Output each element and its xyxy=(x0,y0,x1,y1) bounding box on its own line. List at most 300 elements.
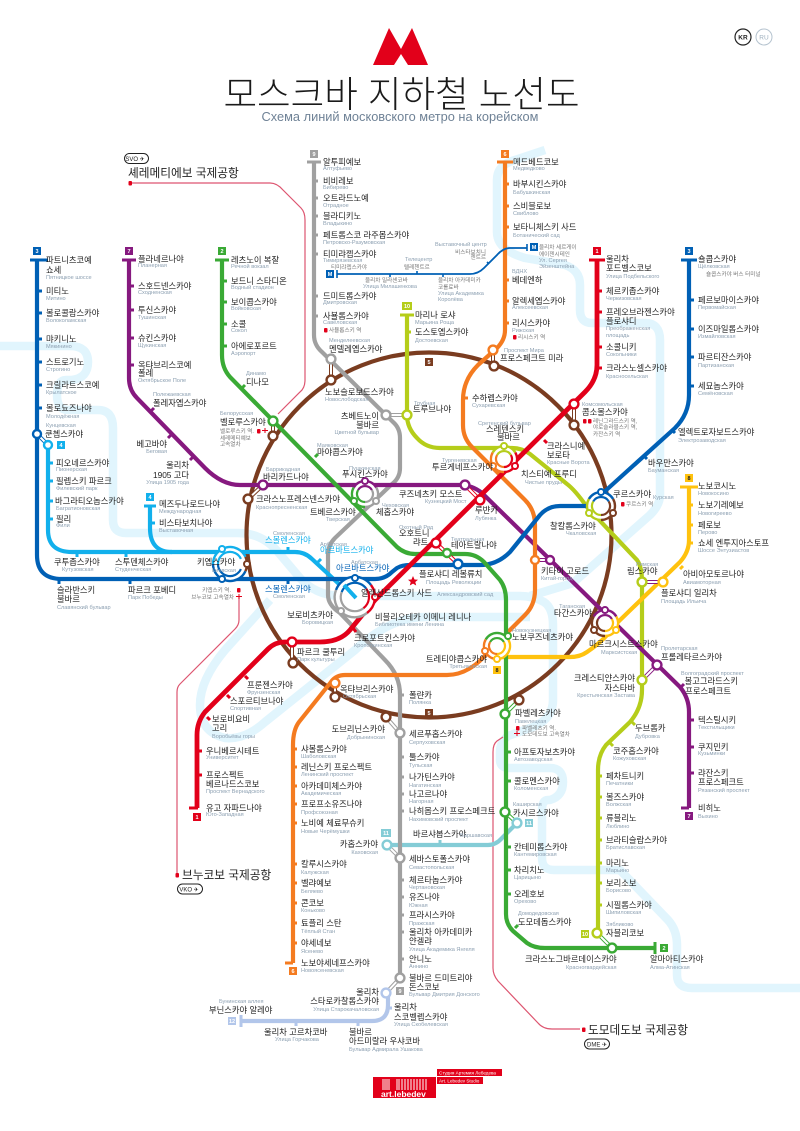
station Kuntsevskaya: Кунцевская xyxy=(46,423,76,429)
station Semyonovskaya xyxy=(698,381,744,397)
station Marksistskaya: 마르크시스트스카야 xyxy=(589,639,658,649)
station Park Pobedy: Парк Победы xyxy=(128,595,163,601)
station Nagornaya: 나고르나야 xyxy=(409,789,448,799)
station Planernaya: Планерная xyxy=(138,263,167,269)
station Telecentr xyxy=(404,257,432,271)
station Tretyakovskaya: Третьяковская xyxy=(449,664,487,670)
station Skhodnenskaya: Сходненская xyxy=(138,290,172,296)
station Arbatskaya light: 아르바트스카야 xyxy=(320,545,374,555)
station Leninsky Prospekt: 레닌스키 프로스펙트 xyxy=(301,762,372,772)
station Belorusskaya: 고속열차 xyxy=(220,440,241,448)
station Sevastopolskaya: Севастопольская xyxy=(409,865,454,871)
station Shipilovskaya: 시필롭스카야 xyxy=(606,900,652,910)
station Tekstilshchiki xyxy=(698,715,736,731)
station Lyublino: Люблино xyxy=(606,824,629,830)
station Sretensky Bulvar: 불바르 xyxy=(497,432,520,442)
station Ryazansky: 랴잔스키 xyxy=(698,768,729,778)
station Akademika Yangelya: 울리차 아카데미카 xyxy=(409,927,473,937)
language switch RU xyxy=(756,29,772,45)
station Lubyanka: 루뱐카 xyxy=(475,505,498,515)
station Rizhskaya xyxy=(512,318,551,341)
station Domodedovskaya: Домодедовская xyxy=(518,911,559,917)
station Shabolovskaya: 샤볼롭스카야 xyxy=(301,744,347,754)
station Slavyansky Bulvar: 불바르 xyxy=(57,594,80,604)
station Aviamotornaya: 아비아모토르나야 xyxy=(683,569,744,579)
station Orekhovo: 오레호보 xyxy=(514,889,545,899)
airport Sheremetyevo xyxy=(124,154,239,180)
station Ploshchad Revolyutsii: Площадь Революции xyxy=(426,580,481,586)
station Tulskaya xyxy=(409,752,440,769)
station Novokosino: 노보코시노 xyxy=(698,481,737,491)
station Perovo: Перово xyxy=(698,530,717,536)
station Sportivnaya: Спортивная xyxy=(230,706,261,712)
station Tekstilshchiki: 텍스틸시키 xyxy=(698,715,736,725)
station Skobelevskaya: 스코벨렙스카야 xyxy=(394,1012,448,1022)
station Kuzminki xyxy=(698,742,729,757)
station Vystavochny Tsentr: 첸트르 xyxy=(471,253,486,261)
station Dubrovka xyxy=(635,723,666,740)
station Strogino: Строгино xyxy=(46,367,70,373)
station Begovaya: 베고바야 xyxy=(136,439,167,449)
station Polezhaevskaya: Полежаевская xyxy=(153,392,191,398)
station Prazhskaya: Пражская xyxy=(409,921,434,927)
station Kurskaya: Курская xyxy=(653,495,674,501)
line number badges: 1 xyxy=(195,815,199,821)
station Buninskaya Alleya xyxy=(209,999,273,1015)
station Mezhdunarodnaya: 메즈두나로드나야 xyxy=(159,499,220,509)
airport Domodedovo: DME ✈ xyxy=(587,1042,607,1048)
station Maryino xyxy=(606,858,629,874)
station Belorusskaya: 벨로루스카야 xyxy=(220,417,266,427)
station Lyublino xyxy=(606,813,637,830)
station Ploshchad Ilyicha: 플로샤디 일리차 xyxy=(661,588,717,598)
station Orekhovo xyxy=(514,889,545,905)
station VDNKh xyxy=(512,269,543,285)
language switch KR: KR xyxy=(738,34,748,42)
station Prazhskaya: 프라시스카야 xyxy=(409,910,455,920)
station Pervomayskaya: 페르보마이스카야 xyxy=(698,295,759,305)
station Borisovo xyxy=(606,878,637,894)
station Annino: 안니노 xyxy=(409,954,432,964)
airport Domodedovo xyxy=(584,1024,688,1049)
station Vernadskogo: Проспект Вернадского xyxy=(206,789,265,795)
station Myakinino xyxy=(46,334,77,350)
station Kakhovskaya: Каховская xyxy=(351,850,378,856)
station Arbatskaya blue: Арбатская xyxy=(351,560,378,566)
station Elektrozavodskaya: 엘렉트로자보드스카야 xyxy=(678,427,755,437)
station Paveletskaya: 파벨레츠카야 xyxy=(515,708,561,718)
station Lubyanka: Лубянка xyxy=(475,516,497,522)
station Borisovo: 보리소보 xyxy=(606,878,637,888)
station Mayakovskaya: Маяковская xyxy=(317,443,348,449)
station Buninskaya Alleya: Бунинская аллея xyxy=(219,999,264,1005)
station Timiryazevskaya: 티미랴젭스카야 xyxy=(331,263,367,271)
station Sokolniki xyxy=(606,342,637,358)
station Vernadskogo xyxy=(206,770,265,795)
station Partizanskaya: Партизанская xyxy=(698,363,734,369)
station Komsomolskaya: 콤소몰스카야 xyxy=(582,407,628,417)
station Izmaylovskaya xyxy=(698,324,759,340)
station Shchyolkovskaya: 숄콥스카야 버스 터미널 xyxy=(706,270,761,278)
station Aeroport: Аэропорт xyxy=(231,351,256,357)
station Cherkizovskaya: 체르키좁스카야 xyxy=(606,286,660,296)
station Filyovsky Park: 필렙스키 파르크 xyxy=(56,476,112,486)
station Ulitsa Gorchakova: 울리차 고르차코바 xyxy=(264,1027,328,1037)
station Studencheskaya xyxy=(115,557,169,573)
station Nagatinskaya: Нагатинская xyxy=(409,783,441,789)
station Sretensky Bulvar: Сретенский бульвар xyxy=(478,420,531,427)
line 8 route xyxy=(497,487,698,657)
station Belorusskaya: 벨로루스키 역. xyxy=(220,427,254,435)
station Novogireyevo xyxy=(698,500,744,517)
station Mendeleevskaya: Менделеевская xyxy=(329,338,370,344)
station Sokol: 소콜 xyxy=(231,319,247,329)
station Yasenevo: Ясенево xyxy=(301,949,323,955)
station Shchukinskaya xyxy=(138,333,177,349)
station Kievskaya: 브누코보 고속열차 xyxy=(191,593,234,601)
station Tulskaya: 툴스카야 xyxy=(409,752,440,762)
station Botanichesky Sad: 보타니체스키 사드 xyxy=(513,222,577,232)
station Savyolovskaya: 사뵬롭스카야 xyxy=(323,311,369,321)
station Bratislavskaya: Братиславская xyxy=(606,845,645,851)
station Tverskaya: 트베르스카야 xyxy=(310,507,356,517)
station Okhotny Ryad: 오호트니 xyxy=(399,528,430,538)
line 3 route xyxy=(30,260,697,584)
station Dinamo: Динамо xyxy=(246,371,266,377)
station Vodny Stadion: 보드니 스타디온 xyxy=(231,276,287,286)
Art Lebedev logo: art.lebedev xyxy=(381,1089,426,1099)
station Vorobyovy Gory xyxy=(212,714,255,740)
station Sukharevskaya: Сухаревская xyxy=(472,403,505,409)
station Shchyolkovskaya xyxy=(698,254,761,278)
station Akademicheskaya xyxy=(301,781,362,797)
station Oktyabrskoye Pole: Октябрьское Поле xyxy=(138,378,186,384)
station Teatralnaya: 테아트랄나야 xyxy=(451,540,497,550)
station Pyatnitskoye: 파트니츠코예 xyxy=(46,255,92,265)
station Starokachalovskaya: Улица Старокачаловская xyxy=(313,1007,379,1013)
station Okhotny Ryad: Охотный Ряд xyxy=(399,524,434,531)
station Krasnoselskaya xyxy=(606,363,667,380)
line number badges: 2 xyxy=(662,946,666,952)
station Novoyasenevskaya: 노보야세네프스카야 xyxy=(301,958,370,968)
language switch RU: RU xyxy=(759,34,769,42)
station Shchyolkovskaya: 숄콥스카야 xyxy=(698,254,737,264)
station Ulitsa Eisensteina: Ул. Сергея xyxy=(539,258,567,264)
station Ulitsa Eisensteina: 에이젠시테인 xyxy=(539,250,570,258)
station Novye Cheryomushki: Новые Черёмушки xyxy=(301,829,350,835)
stations line 9 xyxy=(287,157,496,998)
station Rechnoy Vokzal xyxy=(231,255,279,270)
station Filyovsky Park xyxy=(56,476,112,492)
station Kievskaya: 키옙스키 역. xyxy=(202,586,231,594)
station Kantemirovskaya: Кантемировская xyxy=(514,852,557,858)
station Novogireyevo: 노보기레예보 xyxy=(698,500,744,510)
station Oktyabrskaya: Октябрьская xyxy=(343,694,376,700)
station Vodny Stadion: Водный стадион xyxy=(231,284,274,291)
station Tyoply Stan: Тёплый Стан xyxy=(301,928,335,935)
station Skobelevskaya: Улица Скобелевская xyxy=(394,1022,448,1028)
airport Vnukovo xyxy=(178,869,272,894)
station Krasnoselskaya: 크라스노셀스카야 xyxy=(606,363,667,373)
station Shchyolkovskaya: Щёлковская xyxy=(698,264,730,270)
station Novokuznetskaya: 노보쿠즈네츠카야 xyxy=(512,632,573,642)
station Vernadskogo: 베르나드스코보 xyxy=(206,779,260,789)
monorail M icons xyxy=(326,243,538,278)
line number badges: 3 xyxy=(687,249,691,255)
station Akademika Yangelya: Улица Академика Янгеля xyxy=(409,947,475,953)
station Kropotkinskaya xyxy=(354,633,415,649)
station Barrikadnaya: 바리카드나야 xyxy=(263,472,309,482)
station Belyayevo: Беляево xyxy=(301,889,323,895)
transfer connectors xyxy=(37,350,663,993)
station Sokol: Сокол xyxy=(231,328,247,334)
station Preobrazhenskaya: площадь xyxy=(606,333,629,339)
station Babushkinskaya: 바부시킨스카야 xyxy=(513,179,567,189)
station Biblioteka: 비블리오테카 이메니 레니나 xyxy=(375,612,472,622)
station Maryina Roshcha: 마리나 로샤 xyxy=(415,310,456,320)
station Bibirevo: Бибирево xyxy=(323,185,348,191)
station Maryino: 마리노 xyxy=(606,858,629,868)
station Novoslobodskaya: Новослободская xyxy=(325,397,368,403)
station Kashirskaya: Каширская xyxy=(513,802,542,808)
station Slavyansky Bulvar: Славянский бульвар xyxy=(57,604,111,611)
line 4 route xyxy=(48,445,353,597)
station Otradnoye xyxy=(323,193,369,209)
station Pyatnitskoye: 쇼세 xyxy=(46,265,61,275)
station Vladykino: Владыкино xyxy=(323,221,352,227)
station Pionerskaya: Пионерская xyxy=(56,467,87,473)
station Tverskaya: Тверская xyxy=(326,517,350,523)
station Tushinskaya: 투신스카야 xyxy=(138,305,177,315)
station Kolomenskaya: 콜로멘스카야 xyxy=(514,776,560,786)
station Polezhaevskaya xyxy=(153,392,207,408)
station Mitino: Митино xyxy=(46,296,66,302)
station Preobrazhenskaya: 프레오브라젠스카야 xyxy=(606,307,675,317)
station Dobryninskaya: Добрынинская xyxy=(347,735,385,741)
station Preobrazhenskaya: 플로샤디 xyxy=(606,316,637,326)
station Rechnoy Vokzal: 레츠노이 복잘 xyxy=(231,255,279,265)
station Vystavochny Tsentr: Выставочный центр xyxy=(435,241,487,248)
station Novoslobodskaya: 노보슬로보드스카야 xyxy=(325,387,394,397)
station Timiryazevskaya: 티미랴젭스카야 xyxy=(323,249,377,259)
station Babushkinskaya: Бабушкинская xyxy=(513,190,550,196)
station Tretyakovskaya xyxy=(426,654,487,670)
station Okhotny Ryad: 랴트 xyxy=(413,537,429,547)
station Oktyabrskaya: 옥탸브리스카야 xyxy=(340,684,394,694)
station Frunzenskaya: Фрунзенская xyxy=(247,690,280,696)
station Komsomolskaya: Комсомольская xyxy=(582,402,623,408)
station Yugo-Zapadnaya xyxy=(206,803,262,818)
station Ryazansky: Рязанский проспект xyxy=(698,787,750,794)
station Proletarskaya: Пролетарская xyxy=(661,646,698,652)
station Planernaya xyxy=(138,254,184,269)
station Smolenskaya blue: Смоленская xyxy=(273,594,305,600)
station Petrovsko-Razumovskaya xyxy=(323,230,410,246)
line 11 route xyxy=(387,823,517,845)
station Belyayevo: 벨랴예보 xyxy=(301,878,332,888)
station Savyolovskaya: Савёловская xyxy=(323,320,357,326)
station Kropotkinskaya: Кропоткинская xyxy=(354,643,392,649)
station Kitay-gorod: Китай-город xyxy=(541,575,573,582)
station Chkalovskaya: 찰칼롭스카야 xyxy=(550,521,596,531)
line number badges: 7 xyxy=(687,814,691,820)
station Bibirevo xyxy=(323,176,354,191)
station Bulvar Dmitriya Donskogo xyxy=(409,973,480,998)
station Krestyanskaya Zastava: 자스타바 xyxy=(604,683,635,693)
station Ploshchad Ilyicha xyxy=(661,588,717,605)
red star xyxy=(408,576,418,586)
station Prospekt Mira xyxy=(500,348,564,363)
station Orekhovo: Орехово xyxy=(514,899,536,905)
station Pechatniki: 페차트니키 xyxy=(606,771,644,781)
station Rimskaya xyxy=(627,562,658,576)
station Akademika Korolyova xyxy=(438,276,485,303)
station Kitay-gorod xyxy=(541,566,589,582)
station Trubnaya: 트루브나야 xyxy=(413,404,452,414)
subtitle: Схема линий московского метро на корейском xyxy=(262,109,538,124)
station Annino: Аннино xyxy=(409,964,428,970)
station Aviamotornaya: Авиамоторная xyxy=(683,580,721,586)
station Belorusskaya xyxy=(220,411,266,448)
station Molodyozhnaya xyxy=(46,403,92,420)
station Smolenskaya blue: 스몰렌스카야 xyxy=(265,584,311,594)
station Bulvar Dmitriya Donskogo: Бульвар Дмитрия Донского xyxy=(409,992,480,998)
station Trubnaya: Трубная xyxy=(414,401,435,407)
station Serpukhovskaya: Серпуховская xyxy=(409,740,445,746)
station Vorobyovy Gory: 고리 xyxy=(212,723,227,733)
line number badges: 1 xyxy=(595,249,599,255)
station Vystavochny Tsentr: 비스타보치니 xyxy=(455,248,486,256)
station Tekstilshchiki: Текстильщики xyxy=(698,725,735,731)
station Park Pobedy: 파르크 포베디 xyxy=(128,585,176,595)
station Borovitskaya: 보로비츠카야 xyxy=(287,610,333,620)
station Taganskaya: Таганская xyxy=(559,604,585,610)
station Profsoyuznaya: Профсоюзная xyxy=(301,810,338,816)
station Kuznetsky Most xyxy=(399,489,467,505)
station Aeroport xyxy=(231,341,277,357)
station Kuntsevskaya: 쿤쳅스카야 xyxy=(45,429,84,439)
monorail M icons: M xyxy=(532,245,537,251)
station Universitet xyxy=(206,746,260,761)
station Oktyabrskoye Pole: 폴례 xyxy=(138,368,153,378)
station Volokolamskaya xyxy=(46,308,100,324)
language switch KR xyxy=(735,29,751,45)
station Petrovsko-Razumovskaya: Петровско-Разумовская xyxy=(323,240,385,246)
station Shabolovskaya: Шаболовская xyxy=(301,754,336,760)
Art Lebedev logo: Art. Lebedev Studio xyxy=(439,1078,480,1083)
station Dostoyevskaya xyxy=(415,327,469,344)
airport Sheremetyevo: SVO ✈ xyxy=(125,156,145,163)
station Partizanskaya: 파르티잔스카야 xyxy=(698,352,752,362)
hub: Turgenevskaya Sretensky Chistye Prudy xyxy=(490,443,518,472)
station Yuzhnaya xyxy=(409,892,440,909)
station Chkalovskaya: Чкаловская xyxy=(566,531,596,537)
station Krylatskoye: 크릴라트스코예 xyxy=(46,380,99,390)
station Maryina Roshcha: Марьина Роща xyxy=(415,320,455,326)
station Fili: Фили xyxy=(56,523,70,529)
station Strogino xyxy=(46,357,85,373)
station Polyanka: Полянка xyxy=(409,700,432,706)
station Akademika Korolyova: Королёва xyxy=(438,297,464,303)
station Mendeleevskaya: 멘델레옙스카야 xyxy=(329,344,383,354)
station Vystavochnaya: Выставочная xyxy=(159,528,193,534)
station Shabolovskaya xyxy=(301,744,347,760)
station Krasnye Vorota xyxy=(547,441,590,466)
station Yugo-Zapadnaya: 유고 자파드나야 xyxy=(206,803,262,813)
station Voykovskaya xyxy=(231,297,277,312)
station Kutuzovskaya: Кутузовская xyxy=(62,567,94,573)
line number badges: 5 xyxy=(427,711,431,717)
station Kurskaya xyxy=(613,489,674,508)
station Rizhskaya: 리시스카야 xyxy=(512,318,551,328)
station Tsaritsyno xyxy=(514,865,545,881)
station Sretensky Bulvar xyxy=(478,420,531,442)
station Sokolniki: Сокольники xyxy=(606,352,637,358)
stations line 12 xyxy=(209,987,448,1053)
station Ulitsa 1905: 1905 고다 xyxy=(153,470,189,480)
station Kievskaya: Киевская xyxy=(212,568,236,574)
station Varshavskaya: 바르샤봅스카야 xyxy=(413,829,467,839)
station Borovitskaya xyxy=(287,610,333,626)
line 10 route xyxy=(400,315,642,933)
station Dostoyevskaya: 도스토옙스카야 xyxy=(415,327,469,337)
station Vernadskogo: 프로스펙트 xyxy=(206,770,245,780)
line number badges: 8 xyxy=(687,476,691,482)
station Savyolovskaya: 사뵬롭스키 역 xyxy=(329,326,361,334)
station Chertanovskaya: 체르타놉스카야 xyxy=(409,875,463,885)
line 1 route xyxy=(189,260,605,808)
station Konkovo: 콘코보 xyxy=(301,898,324,908)
stations line 1 xyxy=(206,254,675,818)
station Aviamotornaya xyxy=(683,569,744,586)
line number badges: 11 xyxy=(526,821,532,827)
station Krylatskoye xyxy=(46,380,99,396)
station Dobryninskaya: 도브리닌스카야 xyxy=(332,724,385,734)
station Sportivnaya: 스포르티브나야 xyxy=(230,696,284,706)
station Admirala Ushakova: 불바르 xyxy=(349,1027,372,1037)
line number badges: 8 xyxy=(495,668,499,674)
stations monorail xyxy=(363,241,577,303)
airport Vnukovo: VKO ✈ xyxy=(179,886,199,894)
station Varshavskaya xyxy=(413,829,492,839)
station Polyanka: 폴랸카 xyxy=(409,690,432,700)
station Pionerskaya xyxy=(56,458,110,473)
station Tsvetnoy Bulvar: 불바르 xyxy=(356,420,379,430)
station Chekhovskaya: Чеховская xyxy=(382,503,409,509)
station Bagrationovskaya: Багратионовская xyxy=(56,506,100,512)
station Altufyevo: 알투피예보 xyxy=(323,157,362,167)
station Aeroport: 아에로포르트 xyxy=(231,341,277,351)
station Konkovo xyxy=(301,898,325,914)
station Alma-Atinskaya: Алма-Атинская xyxy=(650,965,690,971)
line number badges: 2 xyxy=(220,249,224,255)
station Baumanskaya xyxy=(648,458,694,474)
station Mitino: 미티노 xyxy=(46,286,69,296)
station Domodedovskaya xyxy=(518,911,572,927)
station Marksistskaya: Марксистская xyxy=(601,650,637,656)
station Bulvar Dmitriya Donskogo: 불바르 드미트리야 xyxy=(409,973,473,983)
station Akademika Yangelya: 얀겔랴 xyxy=(409,936,432,946)
station Dubrovka: Дубровка xyxy=(635,734,661,740)
hub: Kurskaya Chkalovskaya xyxy=(586,489,616,520)
station Vystavochnaya xyxy=(159,518,213,534)
metro M logo xyxy=(373,28,428,65)
station Rizhskaya: Рижская xyxy=(512,328,534,334)
station Elektrozavodskaya: Электрозаводская xyxy=(678,438,726,444)
station Krestyanskaya Zastava: 크레스티얀스카야 xyxy=(574,673,635,683)
station Krasnopresnenskaya: Краснопресненская xyxy=(256,505,307,511)
line number badges: 9 xyxy=(398,989,402,995)
